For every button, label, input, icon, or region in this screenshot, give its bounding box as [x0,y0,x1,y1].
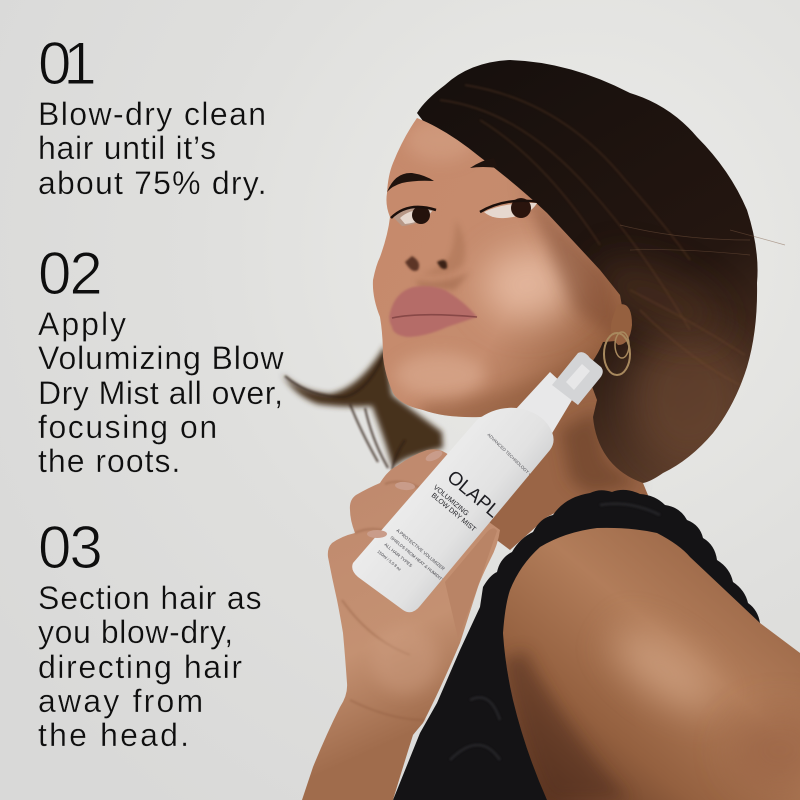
step 02 text: Apply [38,306,128,342]
bottle volume: 150ml / 5.0 fl oz [376,549,402,572]
number 02: 02 [38,240,101,307]
photo: model holding bottle [281,14,800,800]
step 01 [38,30,268,201]
hair [417,60,785,483]
leather highlights on top [450,504,660,760]
ear [611,304,632,345]
step 03 text: Section hair as [38,580,262,616]
step 02 text: the roots. [38,443,181,479]
bottle small print line three: ALL HAIR TYPES [383,542,413,568]
step 03 text: away from [38,683,205,719]
face [373,118,628,430]
step 02 text: Dry Mist all over, [38,375,283,411]
bottle small print line two: SHIELDS FROM HEAT & HUMIDITY [389,535,445,583]
neck shadow [560,410,640,495]
bottle small print: A PROTECTIVE VOLUMIZER [395,528,446,572]
bottle top line: ADVANCED TECHNOLOGY • OLAPLEX [486,432,547,491]
bottle neck and cap [515,352,603,440]
arm and shoulder [503,528,800,800]
step 03 text: you blow-dry, [38,614,234,650]
hair wisps left [282,345,443,470]
bottle [352,352,603,612]
forearm and hand [302,449,500,800]
eyes and brows [387,158,540,226]
number 01: 01 [38,30,89,97]
step 02 text [38,306,284,479]
step 01 text [38,96,268,201]
fingernails [367,449,444,538]
lips [389,286,477,337]
step 03 text: the head. [38,717,191,753]
number 03: 03 [38,514,101,581]
step 03 text [38,580,262,753]
step 01 text: hair until it’s [38,130,217,166]
step 01 text: Blow-dry clean [38,96,267,132]
bottle brand: OLAPLEX [443,467,523,539]
step 03 [38,514,262,753]
step 01 text: about 75% dry. [38,165,268,201]
step 02 text: Volumizing Blow [38,340,284,376]
step 03 text: directing hair [38,649,244,685]
neck [470,370,650,550]
thumb [445,528,497,638]
bottle product name line two: BLOW DRY MIST [430,492,477,534]
step 02 text: focusing on [38,409,219,445]
nose [405,220,470,290]
bottle product name: VOLUMIZING [432,484,470,518]
black top [393,490,800,800]
earring [604,332,630,375]
step 02 [38,240,284,479]
